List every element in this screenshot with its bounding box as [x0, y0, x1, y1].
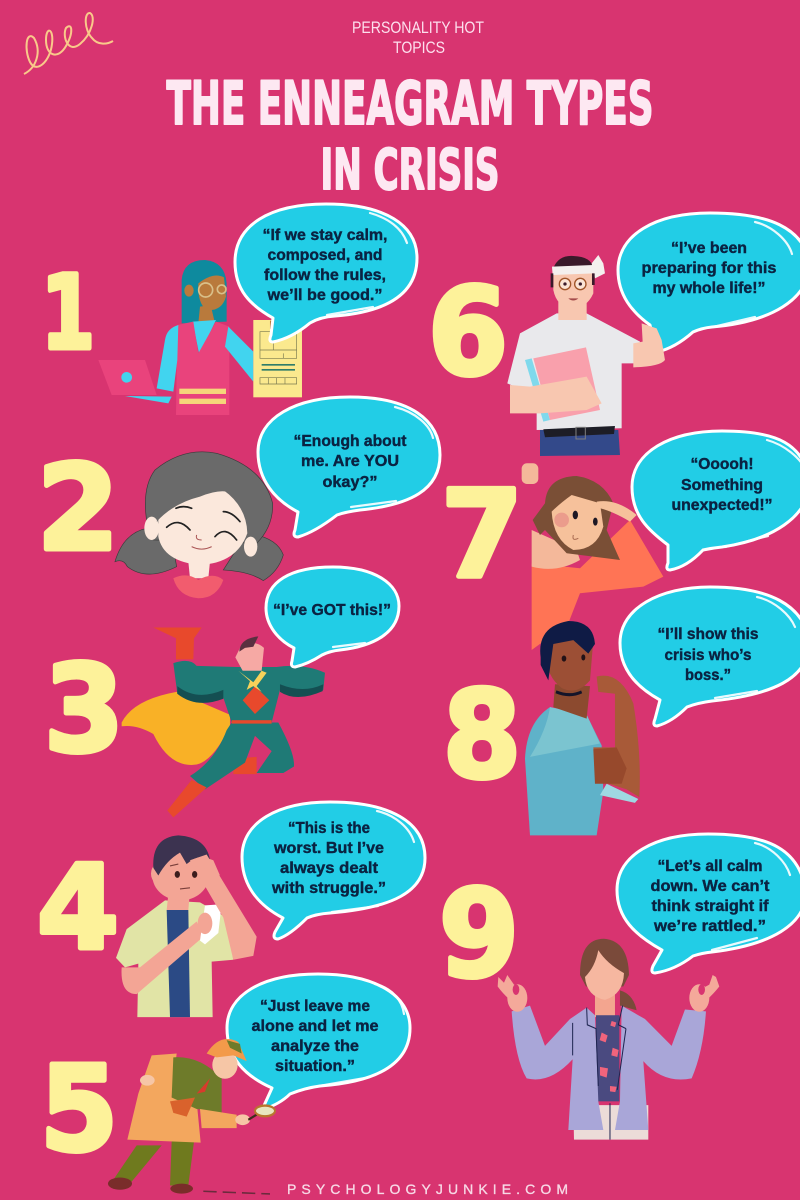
- speech bubble 1: [235, 204, 417, 342]
- panel: type 7: [441, 431, 800, 650]
- speech bubble 5: “Just leave me: [260, 998, 370, 1015]
- character: woman shading her eyes: [522, 463, 663, 650]
- speech bubble 6: “I’ve been: [671, 240, 747, 257]
- speech bubble 3: [266, 567, 399, 667]
- speech bubble 6: preparing for this: [642, 260, 776, 277]
- speech bubble 4: with struggle.”: [271, 880, 386, 897]
- speech bubble 1: “If we stay calm,: [262, 227, 388, 244]
- character: man with headband and notebook: [507, 255, 665, 456]
- number 2: 2: [37, 439, 119, 577]
- speech bubble 8: boss.”: [685, 667, 731, 684]
- number 8: 8: [443, 667, 521, 806]
- kicker: personality hot topics: [352, 18, 484, 57]
- speech bubble 1: we’ll be good.”: [266, 287, 382, 304]
- panel: type 2: [37, 397, 440, 598]
- panel: type 8: [443, 587, 800, 835]
- panel: type 3: [44, 567, 399, 817]
- speech bubble 9: “Let’s all calm: [658, 858, 762, 875]
- character: detective with magnifying glass: [108, 1039, 275, 1194]
- speech bubble 8: “I’ll show this: [658, 626, 758, 643]
- number 5: 5: [40, 1040, 118, 1178]
- speech bubble 7: Something: [681, 477, 763, 494]
- speech bubble 2: [258, 397, 440, 537]
- speech bubble 1: composed, and: [268, 247, 382, 264]
- speech bubble 8: [620, 587, 800, 726]
- panel: type 9: [439, 834, 800, 1140]
- speech bubble 7: “Ooooh!: [690, 456, 754, 473]
- panel: type 5: [40, 974, 410, 1194]
- speech bubble 6: [618, 213, 800, 352]
- character: flying superhero: [122, 628, 325, 817]
- number 9: 9: [439, 866, 519, 1005]
- speech bubble 6: my whole life!”: [652, 280, 766, 297]
- speech bubble 2: okay?”: [322, 474, 378, 491]
- character: smiling grey-haired girl: [115, 452, 283, 598]
- character: meditating woman: [498, 939, 719, 1140]
- speech bubble 5: analyze the: [271, 1038, 359, 1055]
- title: [166, 69, 654, 203]
- speech bubble 9: [617, 834, 800, 973]
- speech bubble 2: me. Are YOU: [301, 453, 399, 470]
- speech bubble 7: [632, 431, 800, 570]
- speech bubble 4: worst. But I’ve: [273, 840, 384, 857]
- panel: type 4: [37, 802, 425, 1017]
- footer website: PSYCHOLOGYJUNKIE.COM: [287, 1181, 568, 1197]
- speech bubble 8: crisis who’s: [664, 647, 752, 664]
- kicker: personality hot topics: PERSONALITY HOT: [352, 18, 484, 37]
- speech bubble 4: always dealt: [280, 860, 378, 877]
- number 1: 1: [41, 254, 95, 373]
- kicker: personality hot topics: TOPICS: [393, 38, 445, 57]
- speech bubble 5: alone and let me: [252, 1018, 379, 1035]
- speech bubble 5: [227, 974, 410, 1110]
- character: man flexing bicep: [525, 621, 640, 835]
- number 4: 4: [37, 841, 119, 976]
- panel: type 1: [41, 204, 417, 415]
- title: IN CRISIS: [320, 138, 500, 203]
- character: worried man with phone: [116, 835, 257, 1017]
- decorative squiggle: [24, 13, 113, 74]
- speech bubble 1: follow the rules,: [264, 267, 386, 284]
- number 7: 7: [441, 466, 523, 605]
- speech bubble 3: “I’ve GOT this!”: [273, 602, 391, 619]
- speech bubble 9: down. We can’t: [650, 878, 770, 895]
- speech bubble 4: “This is the: [288, 820, 370, 837]
- speech bubble 7: unexpected!”: [672, 497, 772, 514]
- speech bubble 2: “Enough about: [294, 433, 406, 450]
- number 6: 6: [428, 264, 508, 403]
- panel: type 6: [428, 213, 800, 456]
- character: woman with laptop and clipboard: [98, 260, 302, 415]
- speech bubble 9: think straight if: [652, 898, 769, 915]
- speech bubble 5: situation.”: [275, 1058, 355, 1075]
- speech bubble 9: we’re rattled.”: [653, 918, 766, 935]
- speech bubble 4: [242, 802, 425, 939]
- number 3: 3: [44, 641, 124, 780]
